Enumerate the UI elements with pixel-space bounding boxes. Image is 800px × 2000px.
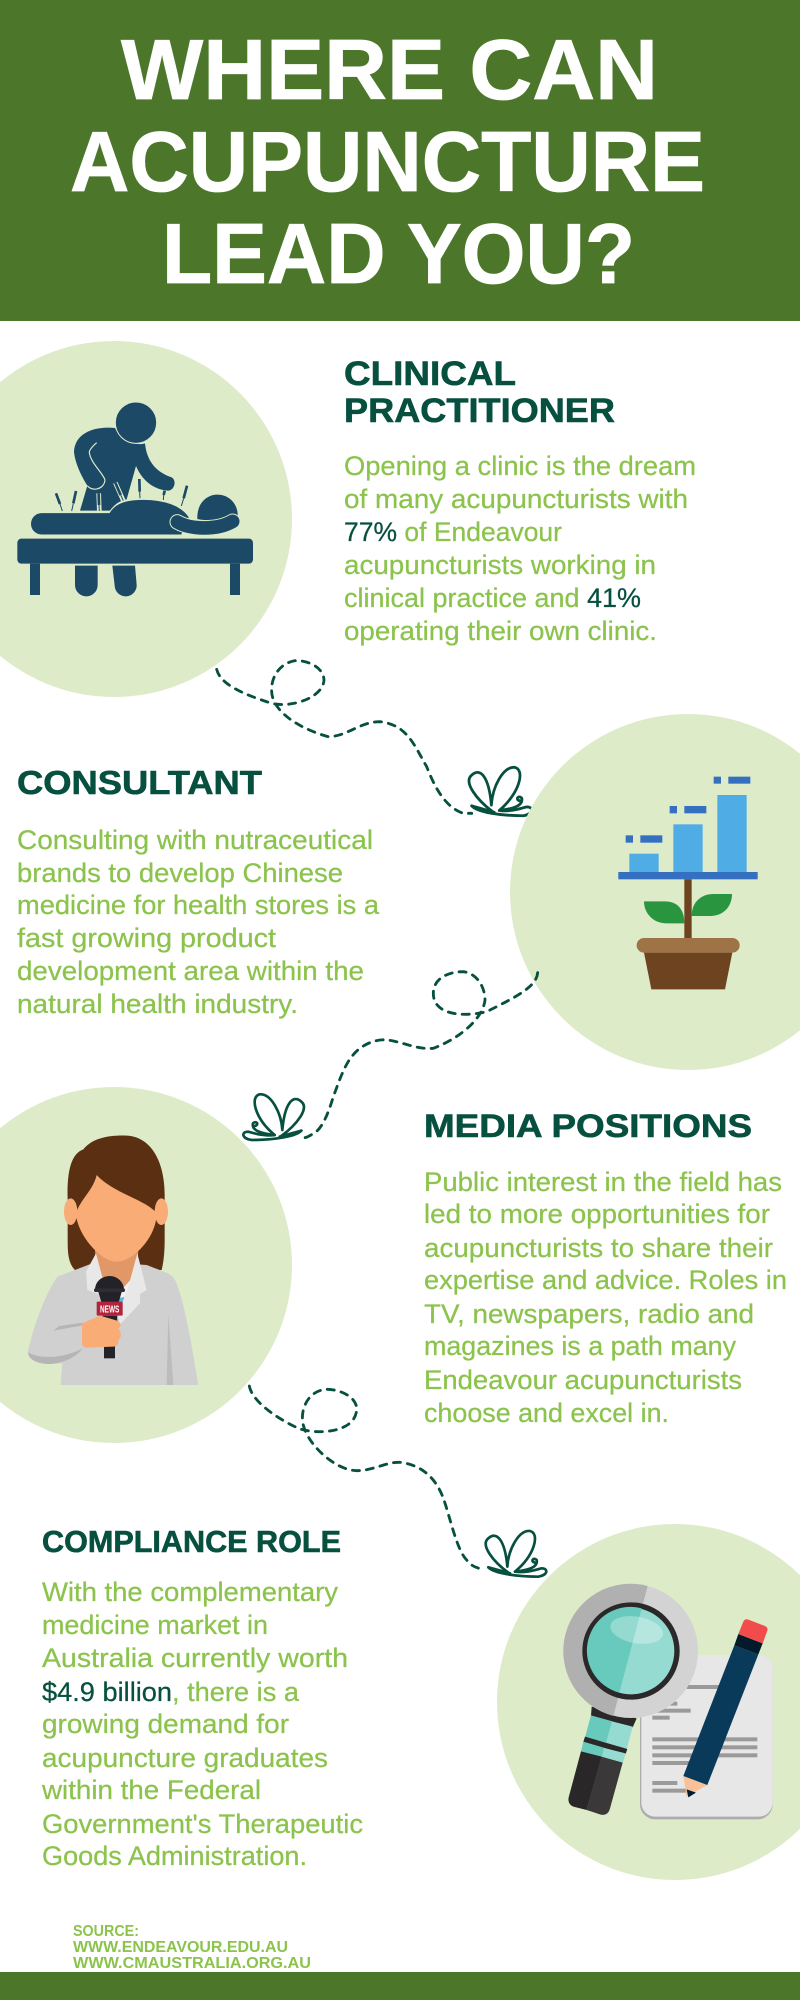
- circle background: [0, 1087, 292, 1443]
- title: ACUPUNCTURE: [70, 115, 705, 210]
- text block: media positions: Public interest in the field has: [424, 1167, 782, 1197]
- text block: consultant: medicine for health stores is a: [17, 890, 379, 920]
- panel: media positions: [0, 1087, 787, 1443]
- title: WHERE CAN: [121, 23, 658, 118]
- text block: media positions: [424, 1167, 787, 1428]
- circle background: [510, 714, 800, 1070]
- title: LEAD YOU?: [162, 207, 635, 302]
- text block: media positions: led to more opportunities for: [424, 1199, 770, 1229]
- circle background: [0, 341, 292, 697]
- icon: plant with bar chart: [618, 777, 758, 989]
- heading: clinical practitioner: [344, 355, 615, 430]
- text block: compliance role: Goods Administration.: [42, 1841, 307, 1871]
- text block: clinical practitioner: operating their own clinic.: [344, 616, 657, 646]
- text block: media positions: expertise and advice. Roles in: [424, 1265, 787, 1295]
- text block: media positions: choose and excel in.: [424, 1398, 669, 1428]
- footer band: [0, 1972, 800, 2000]
- icon: flower 2: [243, 1094, 304, 1140]
- heading: consultant: CONSULTANT: [17, 764, 262, 801]
- arrow: dashed path from clinical to consultant: [217, 661, 532, 816]
- document: [640, 1655, 773, 1819]
- microphone: [94, 1276, 125, 1358]
- source credits: WWW.CMAUSTRALIA.ORG.AU: [73, 1955, 311, 1972]
- text block: clinical practitioner: 77% of Endeavour: [344, 517, 562, 547]
- text block: media positions: Endeavour acupuncturists: [424, 1365, 742, 1395]
- heading: media positions: MEDIA POSITIONS: [424, 1108, 752, 1144]
- text block: clinical practitioner: acupuncturists working in: [344, 550, 656, 580]
- magnifying glass: [563, 1584, 698, 1815]
- text block: compliance role: $4.9 billion, there is a: [42, 1677, 299, 1707]
- arrow: dashed path from consultant to media: [243, 972, 538, 1140]
- icon: flower 1: [469, 767, 532, 816]
- text block: compliance role: acupuncture graduates: [42, 1743, 328, 1773]
- text block: clinical practitioner: [344, 451, 696, 646]
- text block: consultant: natural health industry.: [17, 989, 298, 1019]
- pencil: [683, 1619, 768, 1797]
- text block: compliance role: within the Federal: [41, 1775, 261, 1805]
- circle background: [497, 1524, 800, 1880]
- text block: consultant: fast growing product: [17, 923, 277, 953]
- arrow: dashed path from media to compliance: [249, 1386, 546, 1577]
- text block: media positions: acupuncturists to share their: [424, 1233, 773, 1263]
- text block: clinical practitioner: of many acupuncturists with: [344, 484, 688, 514]
- heading: clinical practitioner: PRACTITIONER: [344, 392, 615, 430]
- text block: compliance role: growing demand for: [42, 1709, 289, 1739]
- text block: consultant: [17, 825, 379, 1019]
- icon: magnifying glass, document and pencil: [563, 1584, 773, 1819]
- icon: news reporter with microphone: [28, 1136, 198, 1385]
- panel: clinical practitioner: [0, 341, 696, 697]
- text block: clinical practitioner: clinical practice and 41%: [344, 583, 641, 613]
- text block: clinical practitioner: Opening a clinic is the dream: [344, 451, 696, 481]
- text block: compliance role: Government's Therapeutic: [42, 1809, 363, 1839]
- title: [70, 23, 705, 302]
- text block: consultant: Consulting with nutraceutical: [17, 825, 373, 855]
- source credits: WWW.ENDEAVOUR.EDU.AU: [73, 1939, 288, 1956]
- text block: consultant: brands to develop Chinese: [17, 858, 343, 888]
- source credits: [73, 1923, 311, 1972]
- icon: flower 3: [486, 1531, 546, 1577]
- text block: media positions: TV, newspapers, radio and: [424, 1299, 754, 1329]
- heading: compliance role: COMPLIANCE ROLE: [42, 1524, 341, 1559]
- header banner: [0, 0, 800, 321]
- panel: compliance role: [41, 1524, 800, 1880]
- text block: compliance role: With the complementary: [42, 1577, 339, 1607]
- panel: consultant: [17, 714, 800, 1070]
- heading: clinical practitioner: CLINICAL: [344, 355, 516, 393]
- text block: consultant: development area within the: [17, 956, 364, 986]
- text block: media positions: magazines is a path many: [424, 1331, 737, 1361]
- text block: compliance role: [41, 1577, 363, 1871]
- microphone: NEWS: [100, 1305, 120, 1316]
- icon: acupuncturist treating patient: [17, 402, 253, 596]
- text block: compliance role: Australia currently worth: [42, 1643, 348, 1673]
- source credits: SOURCE:: [73, 1923, 139, 1940]
- text block: compliance role: medicine market in: [42, 1610, 268, 1640]
